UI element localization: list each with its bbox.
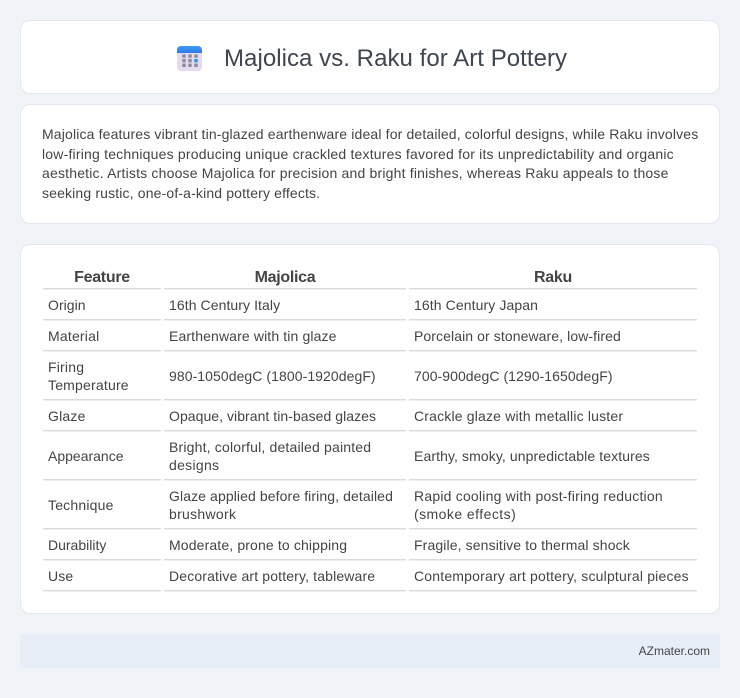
row: origin: Origin xyxy=(48,297,86,313)
row: technique: Glaze applied before firing, detailed xyxy=(169,488,393,504)
row: firing temperature: 980-1050degC (1800-1920degF) xyxy=(169,368,376,384)
summary text xyxy=(42,126,698,201)
summary text: Majolica features vibrant tin-glazed earthenware ideal for detailed, colorful designs, while Raku involves xyxy=(42,126,698,142)
row: durability: Durability xyxy=(48,537,106,553)
title: Majolica vs. Raku for Art Pottery xyxy=(224,45,567,72)
row: material: Earthenware with tin glaze xyxy=(169,328,337,344)
footer bar xyxy=(20,634,720,668)
row: use: Use xyxy=(48,568,73,584)
summary text: seeking rustic, one-of-a-kind pottery effects. xyxy=(42,185,320,201)
panel: summary xyxy=(20,104,720,224)
panel: comparison table xyxy=(20,244,720,614)
summary text: aesthetic. Artists choose Majolica for precision and bright finishes, whereas Raku appeals to those xyxy=(42,165,669,181)
row: use: Decorative art pottery, tableware xyxy=(169,568,375,584)
footer credit: AZmater.com xyxy=(639,644,710,658)
row: durability: Fragile, sensitive to thermal shock xyxy=(414,537,630,553)
row: technique: brushwork xyxy=(169,506,236,522)
row: durability xyxy=(48,537,630,553)
panel: title card xyxy=(20,20,720,94)
row: origin: 16th Century Italy xyxy=(169,297,280,313)
table header: Raku xyxy=(534,269,572,286)
row: technique: Rapid cooling with post-firing reduction xyxy=(414,488,663,504)
row: technique xyxy=(48,488,663,522)
row: material: Porcelain or stoneware, low-fired xyxy=(414,328,621,344)
icon: calendar xyxy=(177,46,202,71)
summary text: low-firing techniques producing unique crackled textures favored for its unpredictability and organic xyxy=(42,146,674,162)
row: use: Contemporary art pottery, sculptural pieces xyxy=(414,568,689,584)
row: origin: 16th Century Japan xyxy=(414,297,538,313)
row: glaze xyxy=(48,408,623,424)
table header: Feature xyxy=(74,269,130,286)
row: origin xyxy=(48,297,538,313)
row: material xyxy=(48,328,621,344)
row: glaze: Crackle glaze with metallic luster xyxy=(414,408,623,424)
row: glaze: Glaze xyxy=(48,408,86,424)
row: use xyxy=(48,568,689,584)
row: appearance: Earthy, smoky, unpredictable textures xyxy=(414,448,650,464)
row: appearance: designs xyxy=(169,457,219,473)
row: durability: Moderate, prone to chipping xyxy=(169,537,347,553)
row: firing temperature: Firing xyxy=(48,359,84,375)
row: glaze: Opaque, vibrant tin-based glazes xyxy=(169,408,376,424)
table header xyxy=(74,269,572,286)
row: material: Material xyxy=(48,328,99,344)
row: appearance: Appearance xyxy=(48,448,124,464)
row: technique: (smoke effects) xyxy=(414,506,516,522)
row: firing temperature: 700-900degC (1290-1650degF) xyxy=(414,368,613,384)
row: technique: Technique xyxy=(48,497,114,513)
row: firing temperature xyxy=(48,359,613,393)
row: appearance xyxy=(48,439,650,473)
table header: Majolica xyxy=(255,269,315,286)
row: appearance: Bright, colorful, detailed painted xyxy=(169,439,371,455)
comparison table xyxy=(43,269,697,592)
row: firing temperature: Temperature xyxy=(48,377,129,393)
